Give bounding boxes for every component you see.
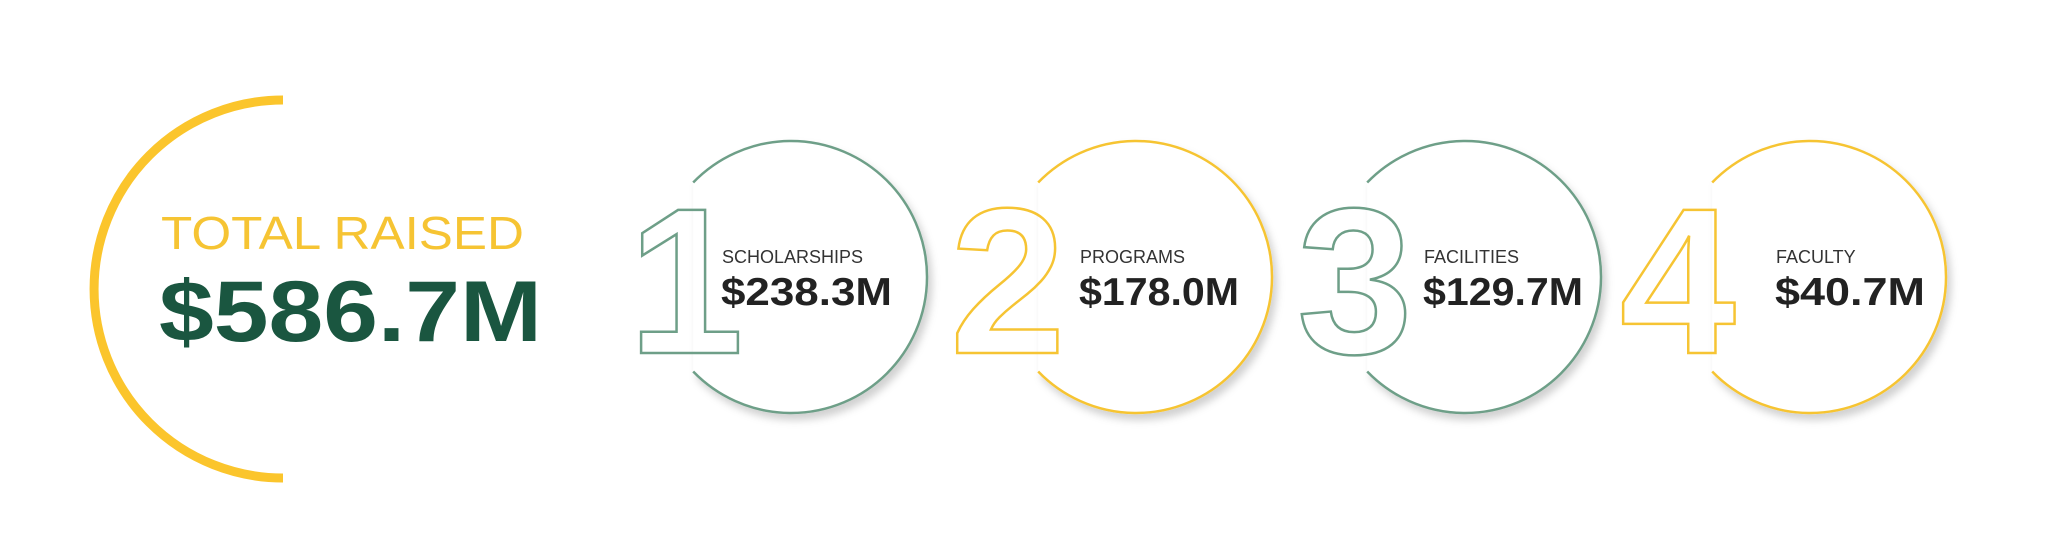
- total label: TOTAL RAISED: [161, 207, 524, 259]
- numeral 4: 4: [1620, 166, 1736, 398]
- label faculty: FACULTY: [1776, 247, 1856, 267]
- value facilities: $129.7M: [1423, 271, 1583, 314]
- circle 1: [693, 141, 927, 413]
- panel: faculty: [1620, 141, 1946, 413]
- total arc: [94, 100, 283, 478]
- label programs: PROGRAMS: [1080, 247, 1185, 267]
- value faculty: $40.7M: [1775, 271, 1925, 314]
- circle 2: [1038, 141, 1272, 413]
- value programs: $178.0M: [1079, 271, 1239, 314]
- label scholarships: SCHOLARSHIPS: [722, 247, 863, 267]
- panel: programs: [950, 141, 1272, 413]
- label facilities: FACILITIES: [1424, 247, 1519, 267]
- numeral 2: 2: [950, 166, 1066, 398]
- panel: total raised: [94, 100, 542, 478]
- numeral 3: 3: [1297, 166, 1413, 398]
- circle 4: [1712, 141, 1946, 413]
- panel: facilities: [1297, 141, 1601, 413]
- numeral 1: 1: [628, 166, 744, 398]
- circle 3: [1367, 141, 1601, 413]
- value scholarships: $238.3M: [721, 271, 892, 314]
- total value: $586.7M: [159, 264, 542, 360]
- panel: scholarships: [628, 141, 927, 413]
